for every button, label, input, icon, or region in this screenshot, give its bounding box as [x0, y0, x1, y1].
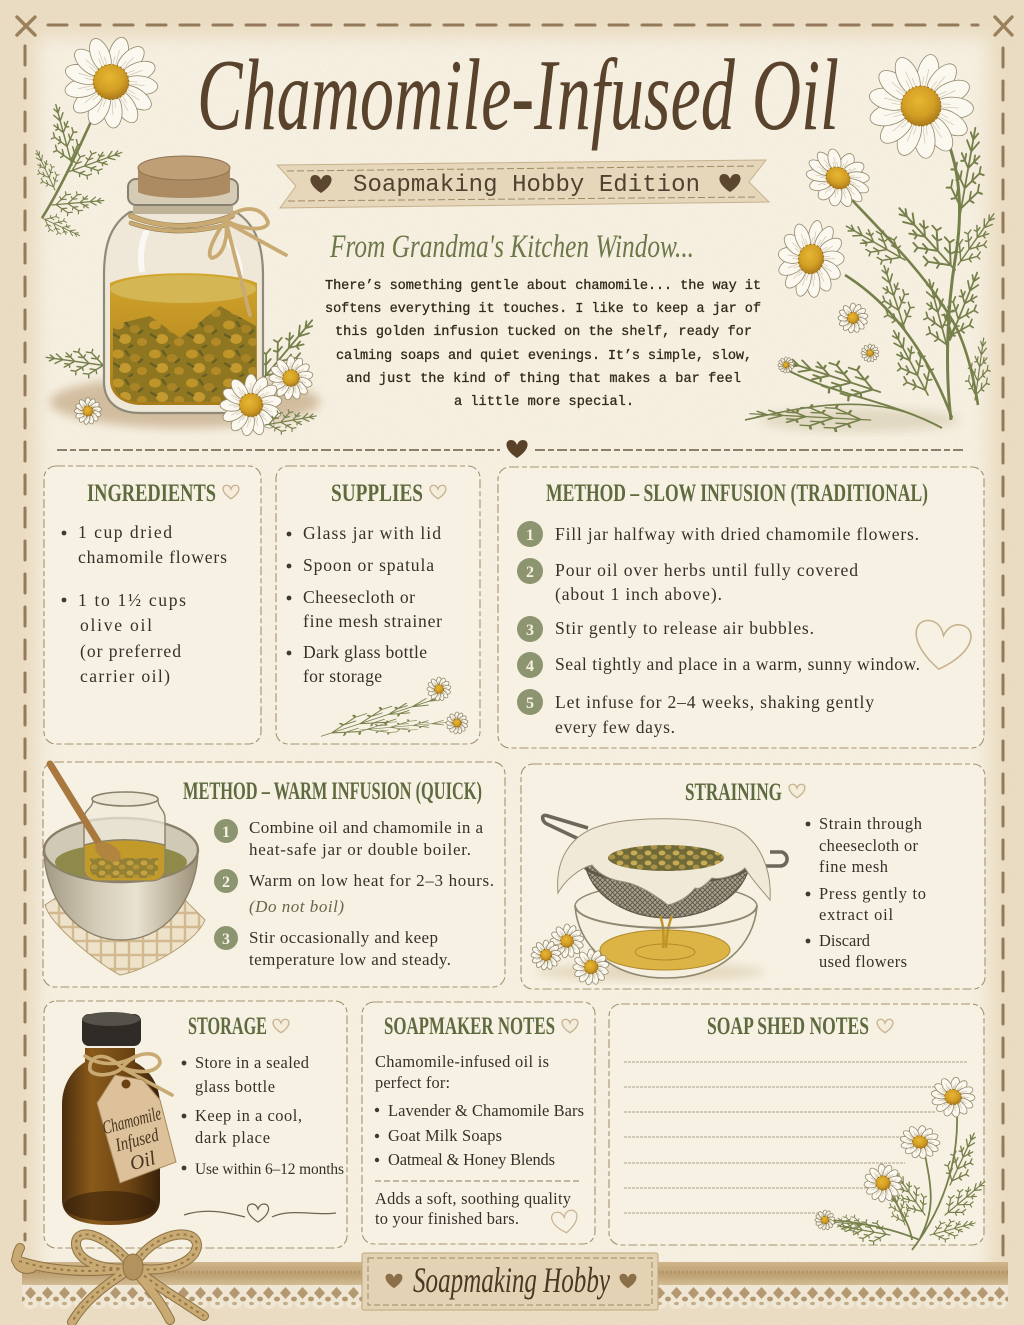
step numbers: [517, 521, 543, 715]
tag label: [100, 1103, 175, 1180]
supplies list: Dark glass bottle: [303, 642, 427, 662]
notes text: to your finished bars.: [375, 1209, 519, 1228]
illustration: bowl jar spoon: [44, 764, 205, 975]
step numbers: 1: [222, 824, 230, 841]
heading: straining: STRAINING: [685, 779, 782, 806]
storage list: Use within 6–12 months: [195, 1161, 344, 1178]
storage list: Store in a sealed: [195, 1053, 309, 1072]
intro text: There’s something gentle about chamomile... the way it: [325, 279, 761, 294]
straining list: cheesecloth or: [819, 836, 919, 855]
intro text: this golden infusion tucked on the shelf, ready for: [335, 325, 752, 340]
panel: method slow infusion: [498, 467, 984, 748]
step numbers: [214, 819, 238, 950]
lace trim: [22, 1262, 1008, 1311]
panel: soap shed notes: [609, 1004, 993, 1250]
supplies list: Cheesecloth or: [303, 587, 415, 607]
heading: ingredients: INGREDIENTS: [87, 480, 216, 507]
storage list: glass bottle: [195, 1077, 275, 1096]
step numbers: 2: [222, 874, 230, 891]
step text: Seal tightly and place in a warm, sunny window.: [555, 654, 920, 674]
heading: storage: STORAGE: [188, 1013, 267, 1040]
storage list: Keep in a cool,: [195, 1106, 302, 1125]
straining list: Discard: [819, 931, 870, 950]
step numbers: 4: [526, 658, 534, 675]
intro text: [325, 279, 761, 410]
notes text: Chamomile-infused oil is: [375, 1052, 549, 1071]
tag label: Chamomile: [100, 1103, 164, 1139]
footer label: [362, 1253, 658, 1310]
storage list: [182, 1053, 344, 1178]
icon: chamomile sprig: [319, 677, 468, 746]
illustration: strainer over glass bowl: [531, 815, 787, 985]
supplies list: Glass jar with lid: [303, 523, 441, 543]
ingredient list: chamomile flowers: [78, 547, 227, 567]
supplies list: Spoon or spatula: [303, 555, 434, 575]
panel: straining: [521, 764, 985, 989]
notes text: [375, 1052, 584, 1228]
illustration: top-left chamomile sprig: [27, 25, 169, 244]
step text: Combine oil and chamomile in a: [249, 818, 483, 837]
heading: from grandma's kitchen window: From Grandma's Kitchen Window...: [329, 229, 694, 265]
step text: Stir occasionally and keep: [249, 928, 438, 947]
illustration: jar of golden oil with cork and twine: [44, 156, 326, 437]
intro text: and just the kind of thing that makes a bar feel: [346, 372, 741, 387]
straining list: Strain through: [819, 814, 922, 833]
notes text: Oatmeal & Honey Blends: [388, 1150, 555, 1169]
panel: storage: [44, 1001, 347, 1248]
step text: Fill jar halfway with dried chamomile flowers.: [555, 524, 919, 544]
heading: soap shed notes: SOAP SHED NOTES: [707, 1013, 869, 1040]
ingredient list: 1 cup dried: [78, 522, 172, 542]
step numbers: 3: [526, 622, 534, 639]
step numbers: 2: [526, 564, 534, 581]
tag label: Oil: [128, 1147, 158, 1175]
footer label: Soapmaking Hobby: [413, 1260, 610, 1300]
straining list: Press gently to: [819, 884, 926, 903]
notes text: perfect for:: [375, 1073, 450, 1092]
step numbers: 1: [526, 527, 534, 544]
heading: soapmaker notes: SOAPMAKER NOTES: [384, 1013, 555, 1040]
icon: outline heart: [551, 1210, 579, 1234]
step text: (about 1 inch above).: [555, 584, 722, 604]
straining list: fine mesh: [819, 857, 888, 876]
supplies list: for storage: [303, 666, 382, 686]
illustration: chamomile plant right: [745, 44, 1006, 433]
twine bow: [16, 1234, 204, 1322]
panel: soapmaker notes: [362, 1002, 595, 1244]
banner: subtitle: [277, 160, 769, 208]
step text: Pour oil over herbs until fully covered: [555, 560, 858, 580]
notes text: Adds a soft, soothing quality: [375, 1189, 572, 1208]
step numbers: 5: [526, 695, 534, 712]
storage list: dark place: [195, 1128, 270, 1147]
step text: [555, 524, 920, 737]
illustration: amber bottle with tag: [62, 1012, 176, 1225]
icon: outline heart: [912, 619, 972, 673]
straining list: extract oil: [819, 905, 893, 924]
step text: Warm on low heat for 2–3 hours.: [249, 871, 494, 890]
heading: warm infusion: METHOD – WARM INFUSION (QUICK): [183, 778, 482, 805]
step text: [249, 818, 494, 969]
step text: Let infuse for 2–4 weeks, shaking gently: [555, 692, 874, 712]
banner: subtitle: Soapmaking Hobby Edition: [353, 172, 700, 199]
ingredient list: 1 to 1½ cups: [78, 590, 186, 610]
step text: every few days.: [555, 717, 675, 737]
step text: temperature low and steady.: [249, 950, 451, 969]
straining list: [806, 814, 926, 971]
ingredient list: [62, 522, 227, 686]
divider with heart: [57, 440, 965, 458]
supplies list: fine mesh strainer: [303, 611, 442, 631]
straining list: used flowers: [819, 952, 907, 971]
ingredient list: olive oil: [80, 615, 152, 635]
step numbers: 3: [222, 931, 230, 948]
intro text: a little more special.: [454, 395, 634, 410]
heading: supplies: SUPPLIES: [331, 480, 423, 507]
notes text: Lavender & Chamomile Bars: [388, 1101, 584, 1120]
intro text: softens everything it touches. I like to keep a jar of: [325, 302, 761, 317]
flourish with heart: [184, 1204, 336, 1222]
intro text: calming soaps and quiet evenings. It’s simple, slow,: [336, 349, 752, 364]
tag label: Infused: [112, 1125, 161, 1157]
illustration: chamomile corner: [815, 1073, 993, 1250]
ingredient list: carrier oil): [80, 666, 170, 686]
supplies list: [287, 523, 442, 686]
ingredient list: (or preferred: [80, 641, 181, 661]
panel: ingredients: [44, 466, 261, 744]
notes text: Goat Milk Soaps: [388, 1126, 502, 1145]
panel: supplies: [276, 466, 480, 746]
writing lines: [624, 1062, 967, 1213]
step text: Stir gently to release air bubbles.: [555, 618, 814, 638]
panel: warm infusion: [43, 762, 505, 987]
step text: (Do not boil): [249, 897, 344, 916]
step text: heat-safe jar or double boiler.: [249, 840, 471, 859]
